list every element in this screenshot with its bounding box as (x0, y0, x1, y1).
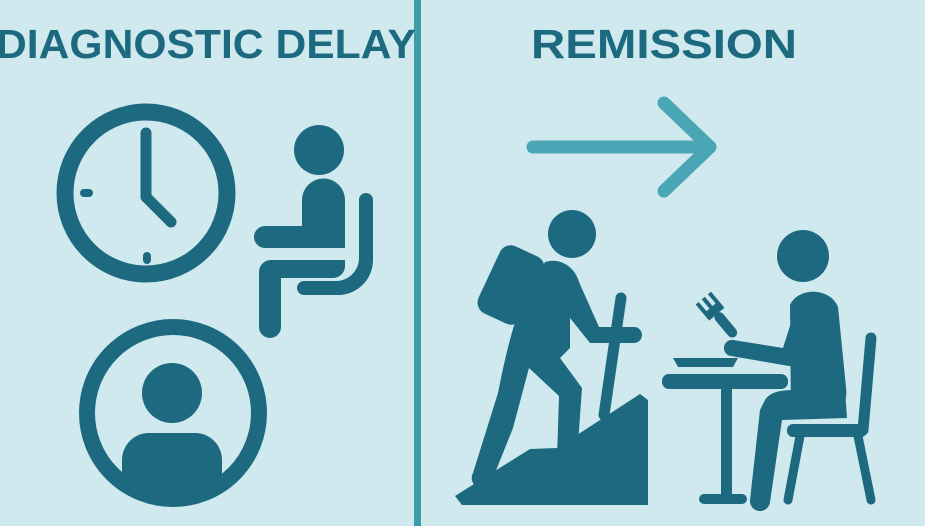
icon: waiting person seated (254, 125, 373, 338)
icon: clock (65, 112, 227, 274)
title: diagnostic delay: DIAGNOSTIC DELAY (0, 21, 416, 67)
icon: person in circle (87, 327, 259, 520)
divider (414, 0, 421, 526)
fork (696, 292, 743, 343)
title: remission: REMISSION (531, 21, 797, 67)
torso (790, 292, 846, 419)
thigh and lower leg (750, 390, 847, 511)
chair (863, 338, 871, 430)
arm (724, 310, 815, 366)
icon: person eating at table (662, 230, 871, 511)
arrow (533, 103, 710, 191)
icon: hiker climbing mountain (455, 210, 648, 505)
